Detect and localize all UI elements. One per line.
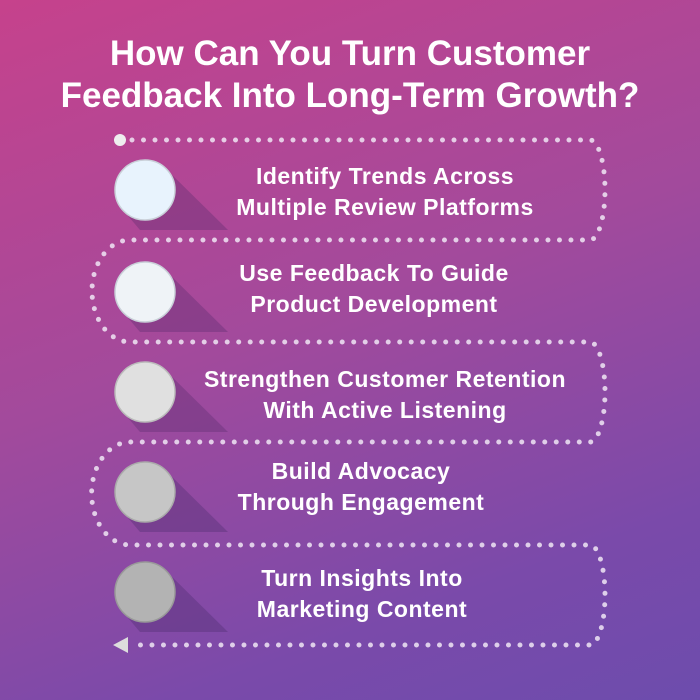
end arrow [113,637,128,653]
step 5 text: Marketing Content [257,596,467,622]
step 3 text: With Active Listening [263,397,507,423]
start dot [114,134,126,146]
step 1 text [236,163,534,220]
step 4 text [238,458,484,515]
step 4 text: Build Advocacy [272,458,450,484]
step 5 text [257,565,467,622]
step 1 text: Multiple Review Platforms [236,194,534,220]
step 3 text [204,366,566,423]
step 4 text: Through Engagement [238,489,484,515]
step 2 text: Use Feedback To Guide [239,260,509,286]
step 3 text: Strengthen Customer Retention [204,366,566,392]
step 2 text [239,260,509,317]
step 2 text: Product Development [250,291,498,317]
dotted path [92,140,605,645]
title [61,34,639,115]
step 5 text: Turn Insights Into [261,565,463,591]
step icons [115,160,228,632]
title: How Can You Turn Customer [110,34,590,73]
title: Feedback Into Long-Term Growth? [61,76,639,115]
step 1 text: Identify Trends Across [256,163,514,189]
